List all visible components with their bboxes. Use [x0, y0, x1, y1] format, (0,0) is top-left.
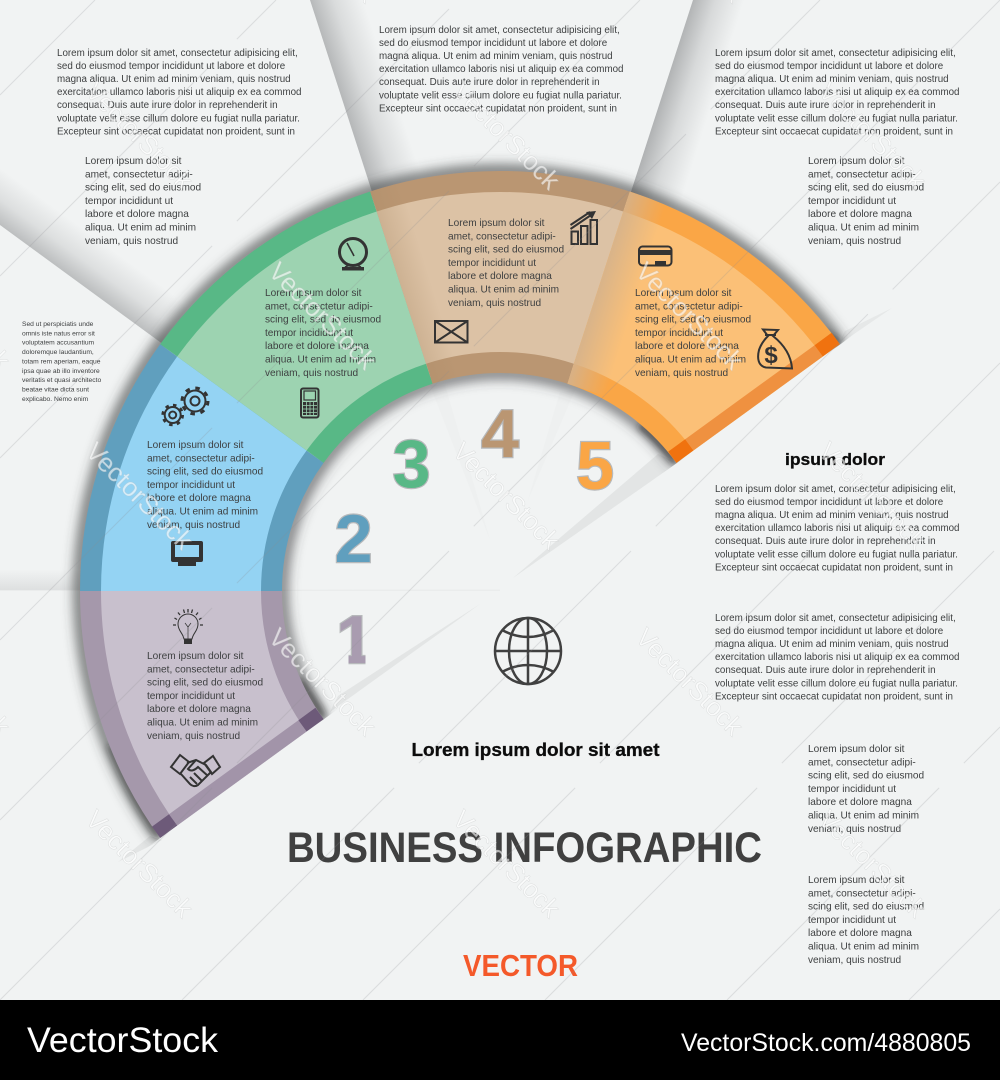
text: upper left narrow block: veniam, quis nostrud: [85, 236, 178, 247]
icon: clock: [340, 238, 366, 270]
text: segment 4: scing elit, sed do eiusmod: [448, 245, 564, 256]
segment 3: green: [160, 192, 433, 463]
vector label: VECTOR: [463, 949, 578, 983]
text: segment 3: tempor incididunt ut: [265, 328, 353, 339]
text: lower right narrow block 1: veniam, quis nostrud: [808, 824, 901, 835]
text: top right wide block: sed do eiusmod tempor incididunt ut labore et dolore: [715, 61, 944, 72]
text: top right wide block: exercitation ullamco laboris nisi ut aliquip ex ea commod: [715, 87, 960, 98]
text: segment 2: amet, consectetur adipi-: [147, 453, 255, 464]
text: small left block: ipsa quae ab illo inventore: [22, 368, 100, 375]
text: lower right narrow block 2: amet, consectetur adipi-: [808, 888, 916, 899]
text: upper right narrow block: tempor incididunt ut: [808, 196, 896, 207]
text: segment 3: aliqua. Ut enim ad minim: [265, 354, 376, 366]
icon: mobile phone: [301, 388, 318, 418]
text: top center wide block: consequat. Duis aute irure dolor in reprehenderit in: [379, 77, 600, 88]
text: segment 3: scing elit, sed do eiusmod: [265, 315, 381, 326]
text: segment 1: amet, consectetur adipi-: [147, 664, 255, 675]
text: segment 4: veniam, quis nostrud: [448, 298, 541, 309]
text: segment 2: scing elit, sed do eiusmod: [147, 467, 263, 478]
text: top right wide block: magna aliqua. Ut enim ad minim veniam, quis nostrud: [715, 74, 949, 85]
text: right wide block 2: consequat. Duis aute irure dolor in reprehenderit in: [715, 665, 936, 676]
title: BUSINESS INFOGRAPHIC: [287, 824, 762, 872]
text: top left wide block: Lorem ipsum dolor sit amet, consectetur adipisicing elit,: [57, 48, 298, 59]
VectorStock watermarks: VectorStock: [80, 804, 200, 924]
text: right wide block 2: Lorem ipsum dolor sit amet, consectetur adipisicing elit,: [715, 613, 956, 624]
text: top right wide block: consequat. Duis aute irure dolor in reprehenderit in: [715, 100, 936, 111]
fold shadow: top left ray: [310, 0, 505, 232]
text: segment 5: amet, consectetur adipi-: [635, 301, 743, 312]
text: right wide block 1: exercitation ullamco laboris nisi ut aliquip ex ea commod: [715, 523, 960, 534]
text: right wide block 1: voluptate velit esse cillum dolore eu fugiat nulla pariatur.: [715, 549, 958, 560]
text: right wide block 1: Excepteur sint occaecat cupidatat non proident, sunt in: [715, 562, 953, 573]
text: segment 3: amet, consectetur adipi-: [265, 301, 373, 312]
text: right wide block 1: magna aliqua. Ut enim ad minim veniam, quis nostrud: [715, 510, 949, 521]
heading: ipsum dolor: ipsum dolor: [785, 450, 885, 469]
text: segment 3: Lorem ipsum dolor sit: [265, 288, 362, 299]
text: top right wide block: Lorem ipsum dolor sit amet, consectetur adipisicing elit,: [715, 48, 956, 59]
text: top center wide block: magna aliqua. Ut enim ad minim veniam, quis nostrud: [379, 51, 613, 62]
text: lower right narrow block 2: veniam, quis nostrud: [808, 955, 901, 966]
footer bar: VectorStock: [27, 1021, 219, 1060]
VectorStock watermarks: VectorStock: [813, 76, 933, 196]
text: upper right narrow block: Lorem ipsum dolor sit: [808, 156, 905, 167]
text: lower right narrow block 1: aliqua. Ut enim ad minim: [808, 810, 919, 822]
text: small left block: totam rem aperiam, eaque: [22, 358, 101, 365]
text: right wide block 2: Excepteur sint occaecat cupidatat non proident, sunt in: [715, 691, 953, 702]
text: small left block: veritatis et quasi architecto: [22, 377, 101, 384]
text: small left block: omnis iste natus error sit: [22, 330, 95, 337]
text: top right wide block: voluptate velit esse cillum dolore eu fugiat nulla pariatur.: [715, 113, 958, 124]
VectorStock watermarks: VectorStock: [447, 436, 567, 556]
icon: rising bar chart: [570, 211, 597, 244]
text: small left block: beatae vitae dicta sunt: [22, 387, 89, 394]
text: segment 4: labore et dolore magna: [448, 271, 552, 282]
text: lower right narrow block 2: labore et dolore magna: [808, 928, 912, 939]
icon: globe: [495, 618, 561, 684]
text: right wide block 2: voluptate velit esse cillum dolore eu fugiat nulla pariatur.: [715, 678, 958, 689]
VectorStock watermarks: VectorStock: [813, 436, 933, 556]
text: upper left narrow block: labore et dolore magna: [85, 209, 189, 220]
text: segment 1: veniam, quis nostrud: [147, 731, 240, 742]
VectorStock watermarks: VectorStock: [263, 622, 383, 742]
text: top left wide block: sed do eiusmod tempor incididunt ut labore et dolore: [57, 61, 286, 72]
text: top left wide block: Excepteur sint occaecat cupidatat non proident, sunt in: [57, 126, 295, 137]
VectorStock watermarks: VectorStock: [630, 622, 750, 742]
text: upper right narrow block: aliqua. Ut enim ad minim: [808, 222, 919, 234]
segment 2: blue: [80, 344, 324, 591]
number 1: 1: [336, 602, 374, 678]
text: lower right narrow block 1: amet, consectetur adipi-: [808, 757, 916, 768]
text: upper left narrow block: aliqua. Ut enim ad minim: [85, 222, 196, 234]
footer bar: [0, 1000, 1000, 1080]
icon: gears: [163, 388, 208, 425]
faint folds inside the arc: [0, 308, 892, 862]
text: segment 4: amet, consectetur adipi-: [448, 231, 556, 242]
text: segment 1: Lorem ipsum dolor sit: [147, 651, 244, 662]
text: right wide block 2: exercitation ullamco laboris nisi ut aliquip ex ea commod: [715, 652, 960, 663]
icon: light bulb: [173, 609, 203, 644]
text: lower right narrow block 1: Lorem ipsum dolor sit: [808, 744, 905, 755]
text: segment 5: labore et dolore magna: [635, 341, 739, 352]
text: segment 5: aliqua. Ut enim ad minim: [635, 354, 746, 366]
icon: envelope: [435, 321, 468, 342]
text: top center wide block: Lorem ipsum dolor sit amet, consectetur adipisicing elit,: [379, 25, 620, 36]
text: top center wide block: exercitation ullamco laboris nisi ut aliquip ex ea commod: [379, 64, 624, 75]
text: lower right narrow block 2: Lorem ipsum dolor sit: [808, 875, 905, 886]
text: lower right narrow block 1: scing elit, sed do eiusmod: [808, 771, 924, 782]
fold shadow: top right ray: [617, 0, 800, 235]
segment 5: orange: [567, 192, 840, 463]
text: small left block: voluptatem accusantium: [22, 340, 95, 347]
VectorStock watermarks: VectorStock: [447, 76, 567, 196]
text: segment 2: tempor incididunt ut: [147, 480, 235, 491]
text: top left wide block: consequat. Duis aute irure dolor in reprehenderit in: [57, 100, 278, 111]
text: top left wide block: voluptate velit esse cillum dolore eu fugiat nulla pariatur.: [57, 113, 300, 124]
text: segment 1: scing elit, sed do eiusmod: [147, 678, 263, 689]
number 2: 2: [335, 501, 372, 577]
VectorStock watermarks: VectorStock: [80, 76, 200, 196]
text: lower right narrow block 2: scing elit, sed do eiusmod: [808, 902, 924, 913]
icon: monitor: [171, 541, 203, 566]
text: segment 5: Lorem ipsum dolor sit: [635, 288, 732, 299]
text: segment 3: veniam, quis nostrud: [265, 368, 358, 379]
text: upper right narrow block: scing elit, sed do eiusmod: [808, 183, 924, 194]
text: segment 2: aliqua. Ut enim ad minim: [147, 506, 258, 518]
icon: money bag: [758, 330, 792, 369]
text: lower right narrow block 1: tempor incididunt ut: [808, 784, 896, 795]
icon: handshake: [171, 755, 220, 786]
text: segment 4: Lorem ipsum dolor sit: [448, 218, 545, 229]
icon: credit card: [639, 246, 672, 266]
text: top right wide block: Excepteur sint occaecat cupidatat non proident, sunt in: [715, 126, 953, 137]
icon: money bag: $: [764, 342, 778, 369]
number 4: 4: [481, 396, 519, 472]
VectorStock watermarks: VectorStock: [630, 256, 750, 376]
subtitle: Lorem ipsum dolor sit amet: [412, 739, 660, 760]
text: segment 5: tempor incididunt ut: [635, 328, 723, 339]
text: lower right narrow block 1: labore et dolore magna: [808, 797, 912, 808]
text: top center wide block: voluptate velit esse cillum dolore eu fugiat nulla pariatur.: [379, 90, 622, 101]
text: segment 4: aliqua. Ut enim ad minim: [448, 284, 559, 296]
text: right wide block 2: magna aliqua. Ut enim ad minim veniam, quis nostrud: [715, 639, 949, 650]
footer bar: VectorStock.com/4880805: [681, 1029, 971, 1057]
text: segment 2: Lorem ipsum dolor sit: [147, 440, 244, 451]
VectorStock watermarks: VectorStock: [263, 256, 383, 376]
VectorStock watermarks: VectorStock: [80, 436, 200, 556]
fold shadow: left horizontal ray: [0, 570, 90, 590]
text: upper left narrow block: scing elit, sed do eiusmod: [85, 183, 201, 194]
text: segment 1: aliqua. Ut enim ad minim: [147, 718, 258, 728]
text: lower right narrow block 2: tempor incididunt ut: [808, 915, 896, 926]
segment 1: purple: [80, 591, 324, 838]
text: segment 4: tempor incididunt ut: [448, 258, 536, 269]
text: small left block: Sed ut perspiciatis unde: [22, 321, 94, 328]
number 5: 5: [576, 428, 614, 504]
text: upper left narrow block: tempor incididunt ut: [85, 196, 173, 207]
VectorStock watermarks: VectorStock: [813, 804, 933, 924]
text: segment 2: veniam, quis nostrud: [147, 520, 240, 531]
text: upper right narrow block: veniam, quis nostrud: [808, 236, 901, 247]
text: upper left narrow block: amet, consectetur adipi-: [85, 169, 193, 180]
text: segment 5: veniam, quis nostrud: [635, 368, 728, 379]
text: segment 3: labore et dolore magna: [265, 341, 369, 352]
text: top left wide block: exercitation ullamco laboris nisi ut aliquip ex ea commod: [57, 87, 302, 98]
text: right wide block 1: consequat. Duis aute irure dolor in reprehenderit in: [715, 536, 936, 547]
text: lower right narrow block 2: aliqua. Ut enim ad minim: [808, 942, 919, 952]
text: segment 1: tempor incididunt ut: [147, 691, 235, 702]
ring shadows: [80, 171, 840, 838]
text: right wide block 1: Lorem ipsum dolor sit amet, consectetur adipisicing elit,: [715, 484, 956, 495]
text: small left block: doloremque laudantium,: [22, 349, 94, 356]
text: upper left narrow block: Lorem ipsum dolor sit: [85, 156, 182, 167]
text: right wide block 2: sed do eiusmod tempor incididunt ut labore et dolore: [715, 626, 944, 637]
segment 4: tan: [370, 171, 630, 384]
text: top center wide block: Excepteur sint occaecat cupidatat non proident, sunt in: [379, 103, 617, 114]
fold shadow: left diagonal ray: [0, 120, 320, 364]
text: small left block: explicabo. Nemo enim: [22, 396, 89, 403]
text: upper right narrow block: labore et dolore magna: [808, 209, 912, 220]
text: upper right narrow block: amet, consectetur adipi-: [808, 169, 916, 180]
text: segment 2: labore et dolore magna: [147, 493, 251, 504]
text: segment 5: scing elit, sed do eiusmod: [635, 315, 751, 326]
text: right wide block 1: sed do eiusmod tempor incididunt ut labore et dolore: [715, 497, 944, 508]
text: segment 1: labore et dolore magna: [147, 704, 251, 715]
text: top center wide block: sed do eiusmod tempor incididunt ut labore et dolore: [379, 38, 608, 49]
VectorStock watermarks: VectorStock: [447, 804, 567, 924]
text: top left wide block: magna aliqua. Ut enim ad minim veniam, quis nostrud: [57, 74, 291, 85]
number 3: 3: [393, 426, 430, 502]
